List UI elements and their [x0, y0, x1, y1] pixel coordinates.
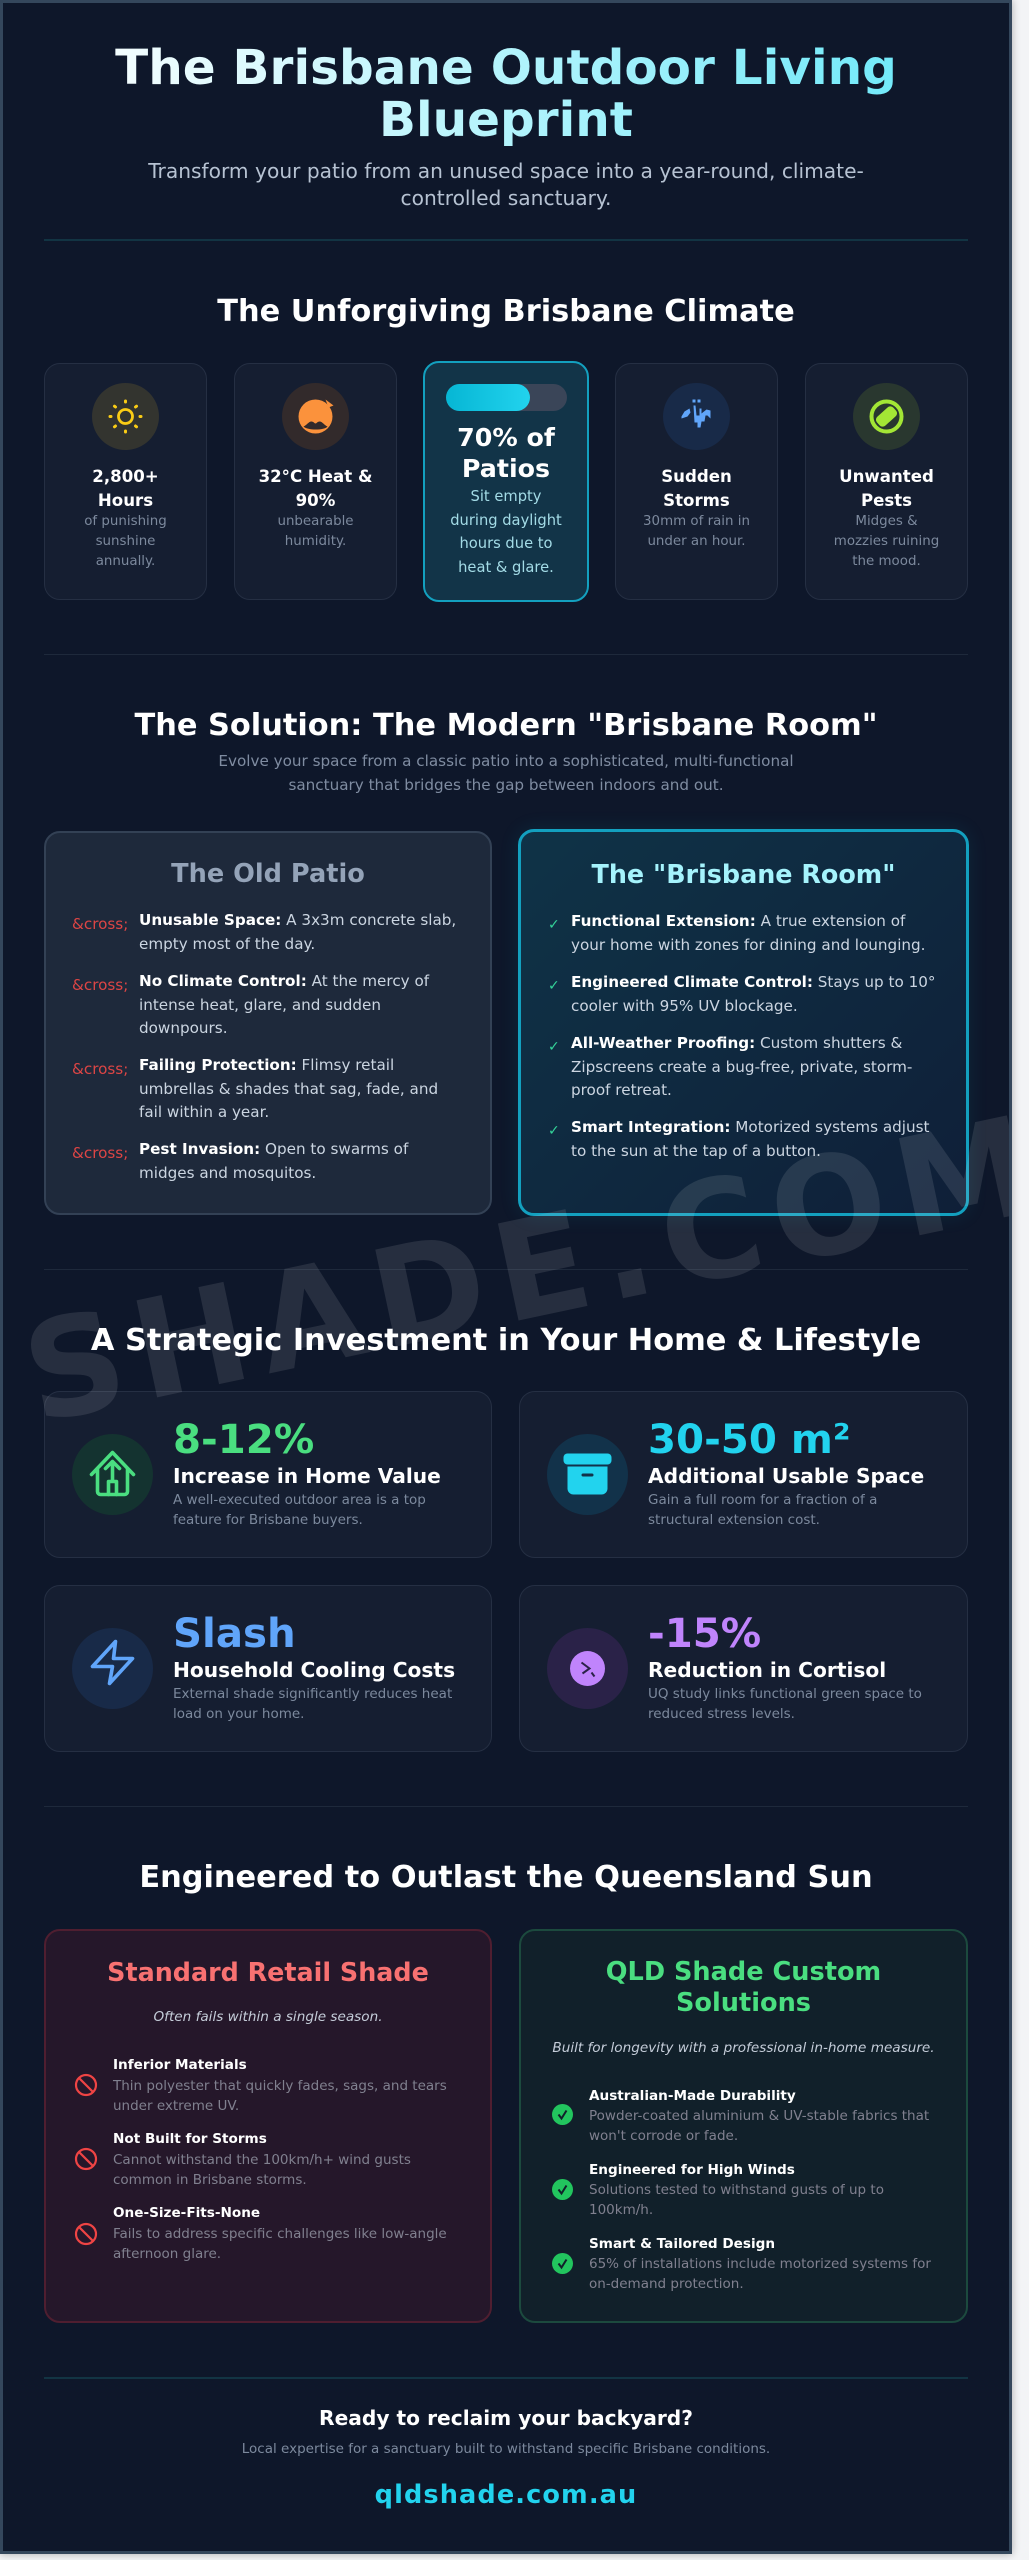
section intro text: sanctuary that bridges the gap between indoors and out.	[288, 776, 724, 794]
panel: pests card	[805, 363, 968, 600]
stat description: Gain a full room for a fraction of a	[648, 1492, 877, 1508]
heading: climate: The Unforgiving Brisbane Climate	[217, 294, 795, 329]
list text: intense heat, glare, and sudden	[139, 996, 381, 1014]
panel: QLD Shade custom solutions	[519, 1929, 968, 2323]
item description	[589, 2106, 929, 2146]
panel heading: The Old Patio	[171, 859, 365, 889]
list text: No Climate Control: At the mercy of	[139, 972, 429, 990]
icon: check circle	[552, 2104, 573, 2125]
icon: box	[547, 1434, 628, 1515]
heading: comparison: Engineered to Outlast the Queensland Sun	[139, 1860, 873, 1895]
heading: investment: A Strategic Investment in Your Home & Lifestyle	[91, 1323, 921, 1358]
title: The Brisbane Outdoor Living	[115, 40, 897, 96]
description: during daylight	[450, 512, 562, 529]
description	[643, 514, 750, 549]
list text	[571, 1118, 930, 1160]
description: Sit empty	[471, 488, 541, 505]
list text: Pest Invasion: Open to swarms of	[139, 1140, 408, 1158]
stat: sudden storms	[661, 467, 732, 510]
item description: 65% of installations include motorized systems for	[589, 2256, 931, 2272]
stat description: A well-executed outdoor area is a top	[173, 1492, 426, 1508]
tagline: Often fails within a single season.	[153, 2009, 383, 2025]
panel heading: QLD Shade Custom	[606, 1957, 881, 1987]
stat description: load on your home.	[173, 1706, 304, 1722]
tagline: Built for longevity with a professional in-home measure.	[552, 2040, 935, 2056]
item title: Inferior Materials	[113, 2057, 247, 2073]
item description	[589, 2180, 884, 2220]
stat: sudden storms: Storms	[663, 491, 730, 510]
list item: &cross;	[72, 1060, 128, 1078]
description: annually.	[96, 554, 155, 569]
stat title: Household Cooling Costs	[173, 1658, 455, 1682]
panel heading	[606, 1957, 881, 2018]
title: Blueprint	[379, 92, 633, 148]
description: under an hour.	[647, 534, 746, 549]
description	[834, 514, 939, 569]
call to action text: Local expertise for a sanctuary built to withstand specific Brisbane conditions.	[242, 2441, 770, 2457]
item description: Solutions tested to withstand gusts of up to	[589, 2182, 884, 2198]
stat: unwanted pests	[839, 467, 934, 510]
item description: on-demand protection.	[589, 2276, 744, 2292]
stat description: UQ study links functional green space to	[648, 1686, 922, 1702]
icon: check circle	[552, 2253, 573, 2274]
stat description	[648, 1686, 922, 1722]
item description: under extreme UV.	[113, 2098, 239, 2114]
icon: ban	[74, 2148, 98, 2170]
item title: Not Built for Storms	[113, 2131, 267, 2147]
list text: Functional Extension: A true extension of	[571, 912, 905, 930]
icon: sun	[92, 383, 159, 450]
subtitle: Transform your patio from an unused space into a year-round, climate-	[148, 159, 864, 183]
panel: storms card	[615, 363, 778, 600]
list text	[139, 1140, 409, 1182]
panel: cortisol stat	[519, 1585, 968, 1752]
call to action heading: Ready to reclaim your backyard?	[319, 2406, 693, 2430]
list text: Smart Integration: Motorized systems adjust	[571, 1118, 930, 1136]
list item: &cross;	[72, 1144, 128, 1162]
stat: 2,800+ hours: 2,800+	[92, 467, 159, 486]
stat: 70% of patios: Patios	[462, 454, 550, 483]
description	[277, 514, 354, 549]
list text: empty most of the day.	[139, 935, 315, 953]
icon: pests	[853, 383, 920, 450]
item description: common in Brisbane storms.	[113, 2172, 307, 2188]
icon: check circle	[552, 2179, 573, 2200]
stat description: feature for Brisbane buyers.	[173, 1512, 363, 1528]
item description: Cannot withstand the 100km/h+ wind gusts	[113, 2152, 411, 2168]
stat description: reduced stress levels.	[648, 1706, 795, 1722]
description: hours due to	[459, 535, 553, 552]
icon: calm face	[547, 1628, 628, 1709]
item title: One-Size-Fits-None	[113, 2205, 260, 2221]
website link: qldshade.com.au	[375, 2480, 637, 2510]
stat: 70% of patios: 70% of	[457, 423, 555, 452]
list text: umbrellas & shades that sag, fade, and	[139, 1080, 438, 1098]
stat number: 30-50 m²	[648, 1416, 851, 1463]
icon: heat and humidity	[282, 383, 349, 450]
list item: &cross;	[72, 976, 128, 994]
stat: 70% of patios	[457, 423, 556, 483]
item title: Australian-Made Durability	[589, 2088, 796, 2104]
panel: usable space stat	[519, 1391, 968, 1558]
item title: Engineered for High Winds	[589, 2162, 795, 2178]
list text: cooler with 95% UV blockage.	[571, 997, 798, 1015]
stat number: Slash	[173, 1610, 296, 1657]
item title: Smart & Tailored Design	[589, 2236, 775, 2252]
stat: sudden storms: Sudden	[661, 467, 732, 486]
check mark: ✓	[548, 1039, 560, 1055]
list text: your home with zones for dining and lounging.	[571, 936, 926, 954]
list text: Engineered Climate Control: Stays up to 10°	[571, 973, 936, 991]
panel: cooling stat	[44, 1585, 492, 1752]
description	[84, 514, 167, 569]
description: of punishing	[84, 514, 167, 529]
panel: heat card	[234, 363, 397, 600]
item description: Powder-coated aluminium & UV-stable fabrics that	[589, 2108, 929, 2124]
progress bar	[446, 384, 567, 411]
stat: 2,800+ hours	[92, 467, 159, 510]
list text: fail within a year.	[139, 1103, 269, 1121]
stat title: Reduction in Cortisol	[648, 1658, 886, 1682]
description	[450, 488, 562, 576]
stat: unwanted pests: Unwanted	[839, 467, 934, 486]
stat: unwanted pests: Pests	[861, 491, 912, 510]
list text: Zipscreens create a bug-free, private, storm-	[571, 1058, 912, 1076]
subtitle: controlled sanctuary.	[401, 186, 611, 210]
description: mozzies ruining	[834, 534, 939, 549]
item description	[589, 2254, 931, 2294]
title	[44, 42, 968, 147]
stat title: Increase in Home Value	[173, 1464, 441, 1488]
stat description: External shade significantly reduces heat	[173, 1686, 452, 1702]
icon: ban	[74, 2222, 98, 2246]
panel: standard retail shade	[44, 1929, 492, 2323]
list text	[139, 1056, 438, 1121]
item description: Fails to address specific challenges like low-angle	[113, 2226, 447, 2242]
stat title: Additional Usable Space	[648, 1464, 924, 1488]
panel heading: Standard Retail Shade	[107, 1957, 429, 1987]
list text	[571, 912, 926, 954]
panel: sunshine card	[44, 363, 207, 600]
stat description	[648, 1492, 877, 1528]
check mark: ✓	[548, 978, 560, 994]
heading: solution: The Solution: The Modern "Brisbane Room"	[134, 708, 878, 743]
check mark: ✓	[548, 1123, 560, 1139]
item description	[113, 2152, 411, 2188]
list text: downpours.	[139, 1019, 228, 1037]
list item: &cross;	[72, 915, 128, 933]
icon: house	[72, 1434, 153, 1515]
item description: Thin polyester that quickly fades, sags, and tears	[113, 2078, 447, 2094]
description: heat & glare.	[458, 559, 554, 576]
item description	[112, 2078, 447, 2114]
stat: 32 degrees and humidity: 90%	[296, 491, 335, 510]
panel: home value stat	[44, 1391, 492, 1558]
icon: ban	[74, 2074, 98, 2096]
description: sunshine	[96, 534, 155, 549]
list text	[139, 972, 430, 1037]
panel heading: The "Brisbane Room"	[592, 859, 895, 889]
item description: 100km/h.	[589, 2202, 653, 2218]
panel: the old patio	[44, 831, 492, 1215]
list text	[571, 973, 936, 1015]
description: the mood.	[852, 554, 921, 569]
stat number: -15%	[648, 1610, 761, 1657]
stat description: structural extension cost.	[648, 1512, 820, 1528]
item description: afternoon glare.	[113, 2246, 221, 2262]
list text: midges and mosquitos.	[139, 1164, 316, 1182]
list text: Unusable Space: A 3x3m concrete slab,	[139, 911, 456, 929]
section intro text	[218, 752, 794, 794]
description: humidity.	[285, 534, 346, 549]
stat: 32 degrees and humidity: 32°C Heat &	[259, 467, 372, 486]
description: 30mm of rain in	[643, 514, 750, 529]
subtitle	[148, 159, 864, 210]
list text: to the sun at the tap of a button.	[571, 1142, 821, 1160]
item description	[113, 2226, 447, 2262]
panel: the Brisbane Room	[518, 829, 969, 1216]
check mark: ✓	[548, 917, 560, 933]
stat description	[173, 1492, 426, 1528]
list text	[571, 1034, 912, 1099]
progress fill 70%	[446, 384, 530, 411]
description: Midges &	[855, 514, 918, 529]
icon: lightning bolt	[72, 1628, 153, 1709]
list text	[139, 911, 456, 953]
stat: 32 degrees and humidity	[259, 467, 372, 510]
list text: proof retreat.	[571, 1081, 672, 1099]
description: unbearable	[277, 514, 354, 529]
stat: 2,800+ hours: Hours	[98, 491, 153, 510]
panel: featured 70 percent card	[423, 361, 589, 602]
stat description	[173, 1686, 452, 1722]
stat number: 8-12%	[173, 1416, 314, 1463]
section intro text: Evolve your space from a classic patio into a sophisticated, multi-functional	[218, 752, 794, 770]
list text: Failing Protection: Flimsy retail	[139, 1056, 394, 1074]
icon: storm	[663, 383, 730, 450]
panel heading: Solutions	[676, 1988, 811, 2018]
item description: won't corrode or fade.	[589, 2128, 738, 2144]
list text: All-Weather Proofing: Custom shutters &	[571, 1034, 902, 1052]
